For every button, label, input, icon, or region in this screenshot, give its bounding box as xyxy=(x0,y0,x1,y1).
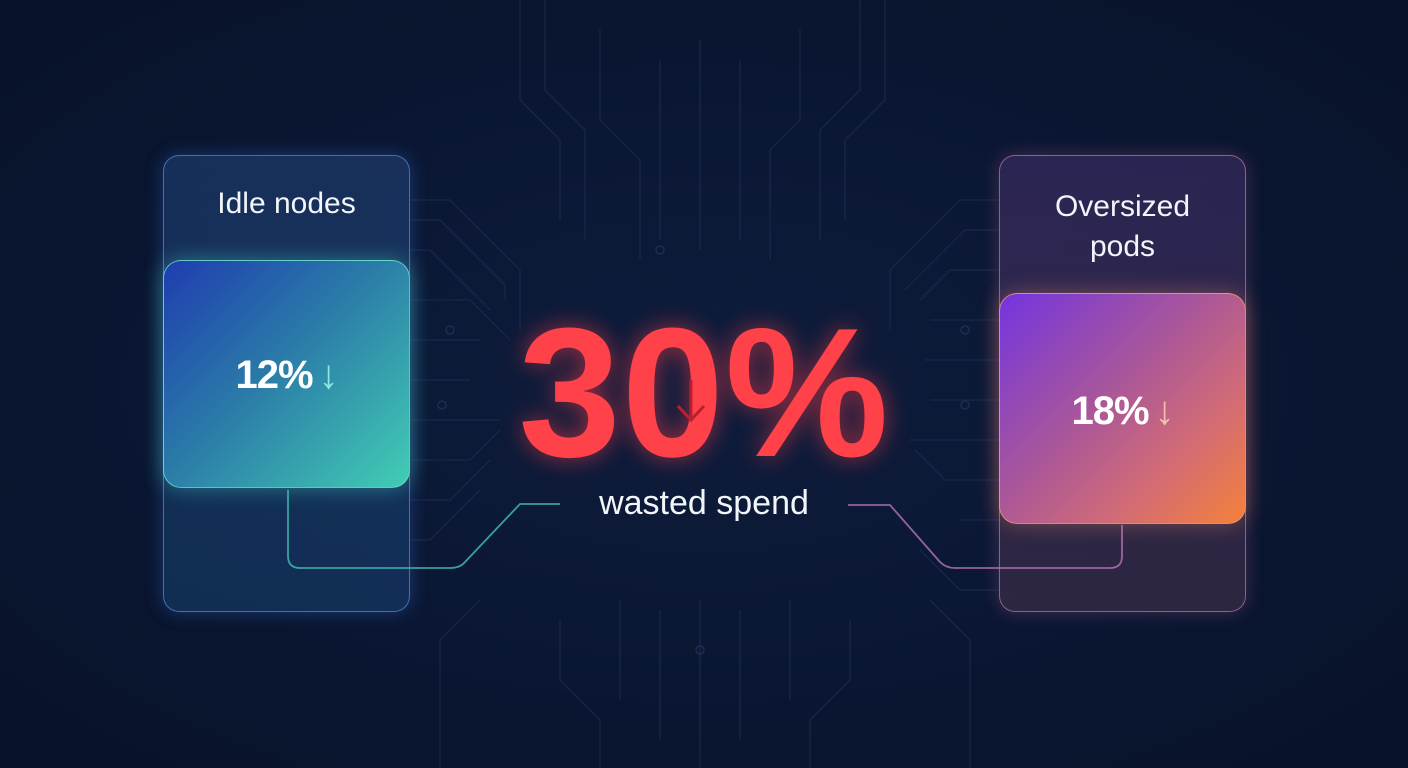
stat box 12%: 12%↓ xyxy=(235,353,338,397)
icon: down arrow in zero xyxy=(677,380,705,422)
panel: idle nodes xyxy=(149,146,424,622)
headline 30%: 30% xyxy=(518,289,890,495)
stat box 12% xyxy=(163,260,410,488)
heading: idle nodes: Idle nodes xyxy=(217,187,356,220)
heading: oversized pods: Oversized xyxy=(1055,190,1190,223)
label: wasted spend: wasted spend xyxy=(599,484,809,522)
stat box 18% xyxy=(999,293,1246,524)
heading: oversized pods: pods xyxy=(1090,230,1155,263)
panel: oversized pods xyxy=(984,146,1260,620)
stat box 18%: 18%↓ xyxy=(1071,389,1174,433)
heading: oversized pods xyxy=(1055,190,1190,263)
